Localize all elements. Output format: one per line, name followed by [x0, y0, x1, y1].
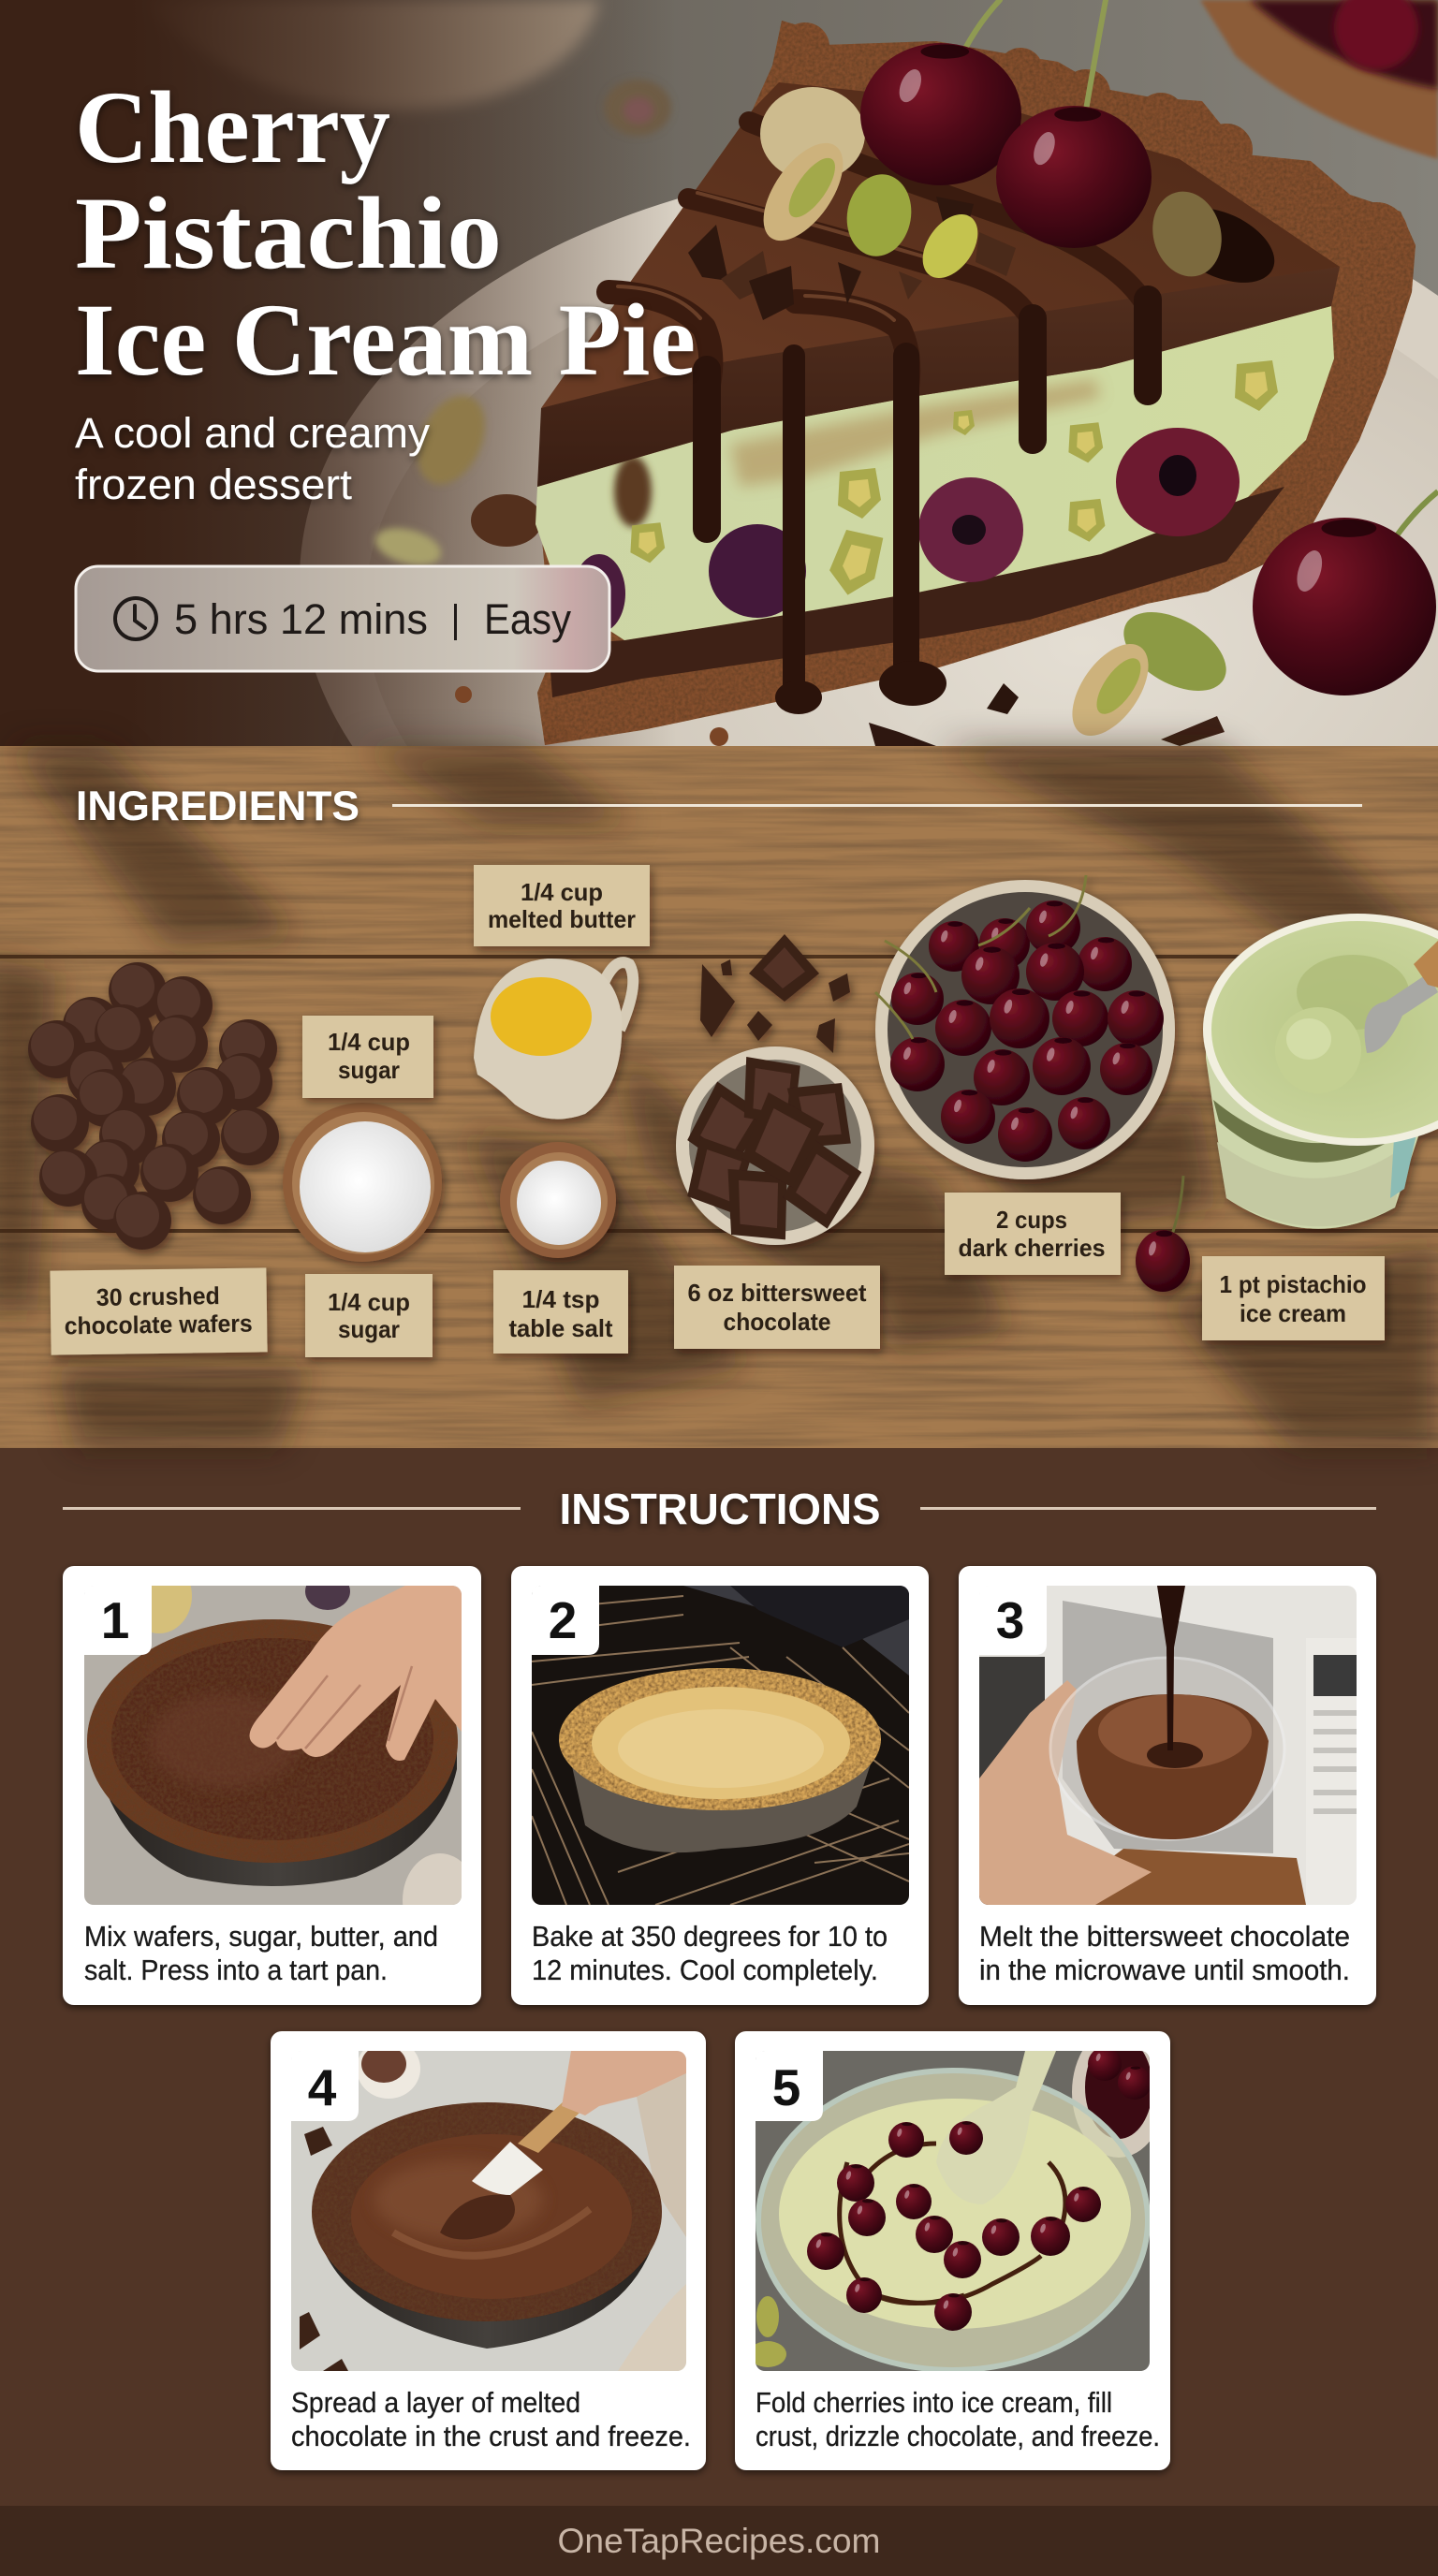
- step 5 image: [749, 2027, 1166, 2371]
- label: melted butter: melted butter: [488, 905, 636, 933]
- step 2 text: 12 minutes. Cool completely.: [532, 1954, 878, 1986]
- ingredient: chocolate bowl: [676, 1046, 874, 1245]
- label: pistachio ice cream: 1 pt pistachio: [1219, 1270, 1367, 1298]
- step 1 image: [84, 1559, 477, 1947]
- number badge 3: [979, 1586, 1047, 1655]
- label: dark cherries: dark cherries: [959, 1234, 1105, 1262]
- step card 3: [959, 1566, 1376, 2005]
- cherry stems: [957, 0, 1106, 126]
- chocolate swirl: [840, 2144, 1065, 2304]
- heading rule: [392, 804, 1362, 807]
- lower chocolate layer: [549, 487, 1284, 697]
- time text: [174, 595, 571, 643]
- step 3 text: in the microwave until smooth.: [979, 1954, 1350, 1986]
- hand pressing crust: [249, 1582, 462, 1761]
- subtitle: [75, 409, 431, 508]
- plate crumbs and chocolate shards: [455, 683, 1225, 746]
- step 4 image: [291, 2039, 686, 2371]
- ingredient: butter pitcher: [474, 959, 633, 1120]
- label: table salt: 1/4 tsp: [522, 1285, 599, 1313]
- label: bittersweet chocolate: 6 oz bittersweet: [687, 1279, 867, 1307]
- time text: Easy: [484, 595, 571, 643]
- footer: [0, 2506, 1438, 2576]
- title: Cherry: [75, 70, 390, 184]
- chocolate drips: [707, 300, 1148, 693]
- step 2 text: [532, 1920, 888, 1986]
- number badge 5: 5: [772, 2058, 800, 2116]
- wood bowl with cherries top-right: [1200, 0, 1438, 159]
- label: bittersweet chocolate: chocolate: [723, 1308, 831, 1336]
- glass bowl: [758, 2071, 1148, 2370]
- blurred bowl top-left: [212, 0, 603, 114]
- pistachio inclusions: [630, 360, 1278, 602]
- chocolate curls: [688, 197, 1016, 320]
- step 2 image: [532, 1586, 909, 1905]
- number badge 1: [84, 1586, 152, 1655]
- cherry inclusions: [573, 428, 1240, 633]
- folded cherries: [807, 2122, 1101, 2331]
- loose pistachios: [756, 2296, 779, 2337]
- step 3 image: [979, 1586, 1357, 1910]
- brown pistachio: [1143, 183, 1231, 285]
- drip bulbs: [775, 661, 946, 714]
- blurred garnish on plate: [372, 80, 671, 572]
- ingredient: salt bowl: [500, 1142, 616, 1258]
- chocolate shards: [300, 2127, 348, 2371]
- label: sugar lower: 1/4 cup: [328, 1288, 410, 1316]
- tan pistachio: [760, 87, 865, 181]
- ingredient: single cherry: [1136, 1176, 1190, 1292]
- label: sugar upper: 1/4 cup: [328, 1028, 410, 1056]
- label: chocolate wafers: chocolate wafers: [65, 1310, 253, 1339]
- ingredient: cherries bowl: [875, 875, 1175, 1179]
- cherry two: [996, 106, 1152, 248]
- glossy pool: [1157, 193, 1286, 298]
- step 5 text: [756, 2386, 1160, 2452]
- hand holding bowl: [979, 1680, 1152, 1905]
- ice cream: [779, 2099, 1131, 2329]
- number badge 4: [291, 2051, 359, 2121]
- oven rack lines: [532, 1596, 909, 1905]
- crust: [537, 21, 1416, 745]
- title: [75, 70, 696, 397]
- pistachio ice cream layer: [536, 306, 1334, 640]
- label: table salt: table salt: [509, 1314, 613, 1342]
- step 1 text: [84, 1920, 438, 1986]
- label: sugar upper: sugar: [338, 1056, 400, 1084]
- step card 2: [511, 1566, 929, 2005]
- step card 1: [63, 1559, 481, 2005]
- time and difficulty pill: [76, 566, 609, 671]
- ingredient: loose chocolate pieces: [700, 934, 850, 1053]
- instructions heading: INSTRUCTIONS: [560, 1485, 880, 1533]
- step 2 text: Bake at 350 degrees for 10 to: [532, 1920, 888, 1953]
- label: melted butter: 1/4 cup: [521, 878, 603, 906]
- chocolate top surface: [541, 82, 1340, 408]
- yellow pistachio: [912, 204, 989, 288]
- chocolate puddle: [471, 494, 542, 547]
- icon: clock: [115, 598, 156, 639]
- label: table salt: [493, 1270, 628, 1354]
- step 1 text: Mix wafers, sugar, butter, and: [84, 1920, 438, 1953]
- label: chocolate wafers: [50, 1267, 268, 1355]
- top chocolate band: [537, 267, 1340, 487]
- cracked pistachio: [748, 130, 858, 254]
- label: dark cherries: [945, 1193, 1121, 1275]
- pie slice: [536, 0, 1416, 745]
- subtitle: A cool and creamy: [75, 409, 431, 457]
- number badge 4: 4: [308, 2058, 337, 2116]
- right cherry on plate: [1253, 491, 1438, 695]
- page background: [0, 1448, 1438, 2576]
- green pistachio: [841, 169, 917, 261]
- step 4 text: [291, 2386, 691, 2452]
- wood counter: [1049, 1849, 1306, 1905]
- serving spoon: [936, 2051, 1056, 2204]
- diagonal shadows: [0, 746, 1438, 1448]
- label: bittersweet chocolate: [674, 1266, 880, 1349]
- ingredient: ice cream tub: [1203, 914, 1438, 1229]
- crust scallops: [781, 22, 1408, 266]
- glass bowl: [1050, 1658, 1284, 1839]
- step 4 text: Spread a layer of melted: [291, 2386, 580, 2419]
- label: sugar lower: [305, 1274, 433, 1357]
- spatula head: [472, 2142, 543, 2195]
- spatula handle: [518, 2069, 613, 2153]
- number badge 1: 1: [101, 1591, 129, 1649]
- label: melted butter: [474, 865, 650, 946]
- number badge 2: [532, 1586, 599, 1655]
- step 5 text: Fold cherries into ice cream, fill: [756, 2386, 1112, 2419]
- chocolate pour stream: [1157, 1586, 1185, 1750]
- label: sugar upper: [302, 1016, 433, 1098]
- plate: [300, 198, 1438, 746]
- cherry one: [860, 43, 1021, 185]
- title: Pistachio: [75, 176, 502, 290]
- heading: INGREDIENTS: [76, 783, 360, 829]
- time text: 5 hrs 12 mins: [174, 595, 428, 643]
- label: pistachio ice cream: ice cream: [1240, 1299, 1346, 1327]
- footer: OneTapRecipes.com: [558, 2522, 880, 2560]
- microwave interior: [1063, 1601, 1273, 1853]
- number badge 5: [756, 2051, 823, 2121]
- ingredient: sugar bowl: [283, 1103, 442, 1262]
- hand: [562, 2051, 686, 2115]
- ingredient: chocolate wafers: [28, 962, 279, 1250]
- hero panel: [0, 0, 1438, 746]
- instructions heading: [63, 1485, 1376, 1533]
- step 4 text: chocolate in the crust and freeze.: [291, 2420, 691, 2452]
- plank seams: [0, 957, 1438, 1231]
- label: pistachio ice cream: [1202, 1256, 1385, 1340]
- chocolate drizzle: [609, 122, 1148, 393]
- number badge 3: 3: [996, 1591, 1024, 1649]
- number badge 2: 2: [549, 1591, 577, 1649]
- step 3 text: Melt the bittersweet chocolate: [979, 1920, 1350, 1953]
- step card 4: [271, 2031, 706, 2470]
- tan swirl in ice cream: [730, 379, 1100, 487]
- label: dark cherries: 2 cups: [996, 1206, 1067, 1234]
- dark left overlay: [0, 0, 653, 746]
- label: chocolate wafers: 30 crushed: [96, 1281, 220, 1311]
- subtitle: frozen dessert: [75, 461, 353, 508]
- step 1 text: salt. Press into a tart pan.: [84, 1954, 388, 1986]
- step 3 text: [979, 1920, 1350, 1986]
- whole pistachios on plate: [1057, 596, 1240, 749]
- title: Ice Cream Pie: [75, 283, 696, 397]
- step 5 text: crust, drizzle chocolate, and freeze.: [756, 2420, 1160, 2452]
- ingredients panel: [0, 746, 1438, 1448]
- step card 5: [735, 2027, 1170, 2470]
- label: sugar lower: sugar: [338, 1315, 400, 1343]
